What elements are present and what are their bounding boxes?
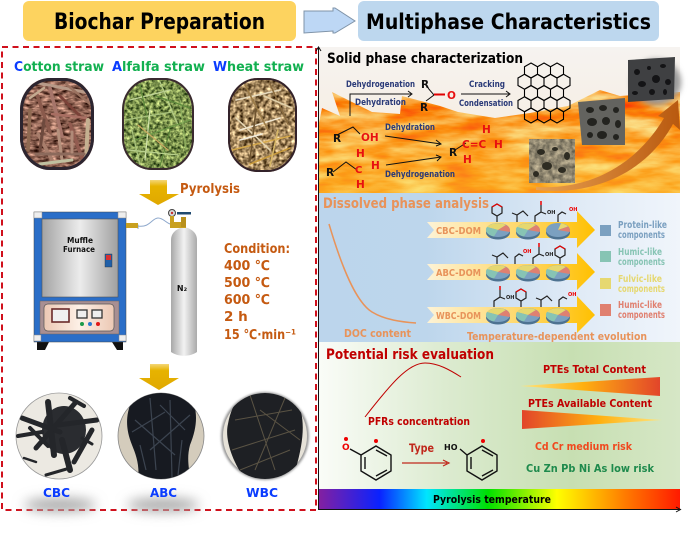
temperature rainbow bar: [318, 489, 680, 509]
panel: biochar preparation: [2, 47, 316, 512]
label: type arrow: [402, 441, 449, 466]
legend: components: [618, 257, 665, 268]
arrow between headers: [304, 8, 355, 33]
wedge: total content increasing: [520, 377, 660, 396]
legend: Fulvic-like: [618, 274, 662, 285]
nitrogen cylinder: N₂: [177, 284, 188, 293]
row: WBC-DOM: OH: [568, 292, 576, 298]
photo: wheat straw: [228, 78, 297, 172]
reaction scheme: H: [482, 124, 491, 136]
photo: CBC biochar: [16, 393, 102, 479]
reaction scheme: R: [421, 79, 429, 91]
heading: dissolved: Dissolved phase analysis: [323, 196, 489, 212]
condition list: 400 ℃: [224, 258, 270, 274]
header: Biochar Preparation: Biochar Preparation: [54, 10, 265, 35]
condition list: 500 ℃: [224, 275, 270, 291]
photo: WBC biochar: [221, 392, 309, 483]
panel: solid phase characterization: [318, 47, 681, 193]
row: WBC-DOM: WBC-DOM: [436, 311, 481, 322]
legend: components: [618, 284, 665, 295]
reaction scheme: C: [355, 165, 362, 176]
row: WBC-DOM: [427, 286, 595, 333]
label: low risk: Cu Zn Pb Ni As low risk: [526, 462, 655, 475]
photo: alfalfa straw: [122, 78, 194, 170]
legend: Humic-like: [618, 300, 662, 311]
photo: ABC biochar: [118, 389, 204, 482]
cube: dark porous: [628, 57, 681, 105]
row: CBC-DOM: CBC-DOM: [436, 226, 481, 237]
wedge: available content decreasing: [522, 410, 662, 429]
condition list: 2 h: [224, 309, 248, 325]
molecule: semiquinone radical: O: [342, 443, 350, 453]
legend: components: [618, 310, 665, 321]
molecule: phenoxyl radical: [444, 439, 497, 480]
DOC curve: [329, 224, 416, 323]
PFR curve: [365, 363, 461, 417]
row: ABC-DOM: ABC-DOM: [436, 268, 481, 279]
reaction scheme: H: [356, 148, 365, 160]
reaction scheme: Dehydrogenation: [346, 80, 415, 90]
reaction scheme: Condensation: [459, 99, 513, 109]
row: ABC-DOM: [427, 243, 595, 290]
heading: solid phase: Solid phase characterization: [327, 51, 523, 67]
label: CBC: CBC: [43, 485, 70, 500]
label: cotton straw: Cotton straw: [14, 60, 104, 75]
reaction scheme: R: [449, 147, 457, 159]
temperature rainbow bar: Pyrolysis temperature: [433, 493, 551, 506]
header: Multiphase Characteristics: [358, 1, 659, 41]
label: type arrow: Type: [409, 441, 434, 455]
muffle furnace: Muffle: [67, 236, 94, 245]
reaction scheme: R: [326, 167, 334, 179]
reaction scheme: H: [494, 139, 503, 151]
condition list: 15 ℃·min⁻¹: [224, 327, 296, 343]
label: WBC: WBC: [246, 485, 278, 500]
molecule: semiquinone radical: [342, 437, 391, 480]
gas tube: [126, 218, 170, 229]
row: ABC-DOM: OH: [545, 252, 553, 258]
reaction scheme: Dehydrogenation: [385, 170, 455, 180]
label: wheat straw: Wheat straw: [213, 60, 304, 75]
reaction scheme: C=C: [462, 139, 487, 151]
arrow: pyrolysis down: [139, 180, 179, 205]
valve on furnace: [126, 223, 138, 228]
label: PTEs available: PTEs Available Content: [528, 397, 652, 410]
label: alfalfa straw: Alfalfa straw: [112, 60, 205, 75]
legend: [600, 220, 667, 321]
row: CBC-DOM: OH: [547, 210, 555, 216]
cube: tan porous: [529, 139, 575, 183]
arrow: to biochar: [139, 364, 179, 390]
reaction scheme: R: [333, 133, 341, 145]
legend: Protein-like: [618, 220, 667, 231]
reaction scheme: H: [356, 179, 365, 191]
label: PFRs concentration: PFRs concentration: [368, 415, 470, 428]
reaction scheme: H: [463, 154, 472, 166]
reaction scheme: Dehydration: [355, 98, 406, 108]
condition list: 600 ℃: [224, 292, 270, 308]
label: pyrolysis: Pyrolysis: [180, 181, 240, 197]
row: WBC-DOM: OH: [506, 295, 514, 301]
condition list: [224, 241, 296, 343]
shadow under ABC: [127, 498, 199, 512]
row: CBC-DOM: [427, 201, 595, 248]
condition list: Condition:: [224, 241, 290, 257]
panel: potential risk evaluation: [318, 342, 680, 489]
shadow under CBC: [24, 498, 96, 512]
graphene lattice: [518, 63, 570, 123]
label: DOC content: DOC content: [344, 327, 411, 340]
reaction scheme: H: [371, 160, 380, 172]
photo: cotton straw: [20, 78, 94, 170]
row: CBC-DOM: OH: [569, 207, 577, 213]
reaction scheme: [326, 79, 513, 191]
axes with arrows: [316, 47, 680, 512]
label: medium risk: Cd Cr medium risk: [535, 440, 633, 453]
header: Multiphase Characteristics: Multiphase Characteristics: [366, 10, 651, 34]
reaction scheme: O: [447, 90, 456, 102]
reaction scheme: Dehydration: [385, 123, 435, 133]
row: ABC-DOM: OH: [523, 249, 531, 255]
reaction scheme: R: [420, 102, 428, 114]
label: temperature-dependent evolution: Temperature-dependent evolution: [467, 330, 647, 343]
muffle furnace: [34, 212, 126, 350]
legend: Humic-like: [618, 247, 662, 258]
cube: grey porous: [578, 98, 625, 145]
label: PTEs total: PTEs Total Content: [543, 363, 646, 376]
big curved arrow: [536, 100, 680, 191]
molecule: phenoxyl radical: HO: [444, 443, 458, 452]
nitrogen cylinder: [168, 210, 197, 356]
panel: dissolved phase analysis: [318, 193, 680, 343]
label: ABC: ABC: [150, 485, 177, 500]
heading: risk: Potential risk evaluation: [326, 347, 494, 363]
header: Biochar Preparation: [23, 1, 296, 41]
reaction scheme: Cracking: [469, 80, 505, 90]
muffle furnace: Furnace: [63, 245, 96, 254]
reaction scheme: OH: [361, 132, 379, 144]
legend: components: [618, 230, 665, 241]
